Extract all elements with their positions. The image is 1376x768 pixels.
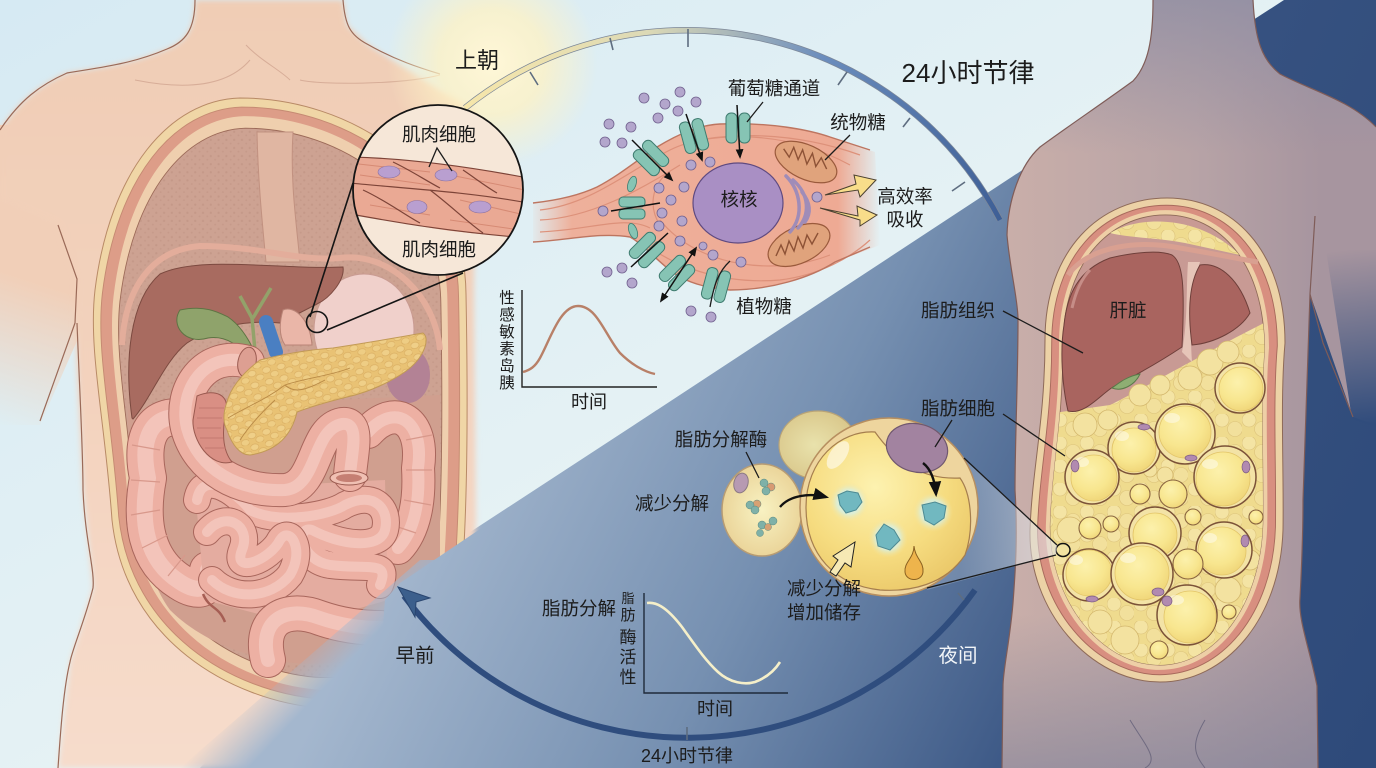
- spleen: [386, 347, 430, 403]
- label: reduced lipolysis: 减少分解: [635, 493, 709, 514]
- right body figure: [1002, 0, 1376, 768]
- lower-left fade of left body into night: [188, 410, 657, 768]
- duodenum and jejunum: [185, 345, 368, 490]
- nucleus: [693, 163, 783, 243]
- y-axis label: 素: [499, 340, 515, 358]
- label: adipocyte: 脂肪细胞: [921, 398, 995, 419]
- zoom pointer lines: [306, 183, 463, 332]
- zoom wedge from right body to fat cell: [927, 458, 1057, 590]
- abdominal fat mass: [1050, 222, 1264, 665]
- small adipocyte: [722, 464, 802, 556]
- x-axis label: 时间: [697, 699, 733, 719]
- y-axis label: 酶: [620, 628, 636, 647]
- y-axis label: 感: [499, 306, 515, 324]
- label: top sugar: 统物糖: [830, 112, 886, 133]
- y-axis label: 肪: [620, 607, 636, 624]
- large adipocyte: [746, 417, 978, 596]
- glucose channels: [619, 113, 750, 304]
- chart: lipase activity: [542, 591, 788, 719]
- label: 24h rhythm bottom: 24小时节律: [641, 746, 733, 766]
- label: increased storage: 增加储存: [787, 602, 861, 623]
- lower cavity backing: [128, 395, 440, 664]
- back adipocyte: [779, 411, 857, 479]
- liver label: 肝脏: [1109, 300, 1147, 321]
- chart side label: 脂肪分解: [542, 598, 616, 619]
- upper arc colour: [465, 30, 1000, 220]
- label: morning: 上朝: [455, 48, 499, 73]
- small intestine: [195, 480, 388, 625]
- left body figure: [0, 0, 476, 768]
- body outline strokes: [0, 0, 440, 768]
- curved black arrows: [780, 495, 826, 507]
- cell body: [533, 124, 880, 290]
- arm fade into night: [1326, 250, 1376, 427]
- label: bottom sugar: 植物糖: [736, 296, 792, 317]
- membrane edge: [533, 124, 870, 290]
- label: early: 早前: [395, 645, 435, 667]
- label: night: 夜间: [938, 645, 978, 667]
- fat cell nuclei: [1071, 424, 1250, 606]
- 24-hour clock arc: [398, 29, 1000, 740]
- label: lipase: 脂肪分解酶: [675, 429, 767, 450]
- rectum: [266, 613, 382, 660]
- lipase clusters: [746, 479, 777, 536]
- body wall opening: [93, 98, 467, 708]
- labels for adipocytes: [635, 429, 861, 623]
- label: muscle cell top: 肌肉细胞: [402, 124, 476, 145]
- label: muscle cell bottom: 肌肉细胞: [402, 239, 476, 260]
- mitochondria: [761, 133, 843, 275]
- liver and falciform ligament: [1062, 252, 1250, 412]
- left arm: [0, 125, 95, 425]
- y-axis label: [499, 289, 515, 392]
- highlight: [822, 437, 854, 473]
- pancreas: [224, 333, 426, 455]
- fibres: [540, 136, 870, 281]
- liver: [129, 264, 343, 419]
- upper arc morning to day: [465, 30, 1000, 220]
- torso vertical shading: [1002, 0, 1376, 768]
- golgi: [786, 176, 809, 232]
- gallbladder and bile duct: [177, 288, 271, 362]
- x-axis label: 时间: [571, 392, 607, 412]
- label: glucose channel: 葡萄糖通道: [728, 78, 820, 99]
- outline arrow: [830, 542, 855, 576]
- stomach: [314, 274, 414, 386]
- y-axis label: 胰: [499, 374, 515, 392]
- magnified muscle inset: [350, 105, 528, 275]
- large fat cells: [1063, 363, 1265, 659]
- label: efficient: 高效率: [877, 186, 933, 207]
- label: absorption: 吸收: [886, 209, 924, 230]
- appendix: [203, 594, 225, 622]
- y-axis label: 性: [499, 289, 515, 307]
- y-axis label: 岛: [499, 357, 515, 375]
- muscle nuclei: [378, 166, 491, 214]
- sunrise glow: [387, 0, 597, 167]
- colon right: [368, 417, 432, 548]
- right body wall opening: [1030, 198, 1285, 682]
- left torso skin: [0, 0, 476, 768]
- callout lines: [429, 148, 452, 171]
- chest creases: [135, 45, 440, 85]
- membrane over liver: [1068, 245, 1258, 275]
- lipase leader: [746, 420, 952, 478]
- zoom marker on fat: [1056, 544, 1070, 556]
- leader lines to right body: [921, 300, 1083, 588]
- label: reduced lipolysis line 1: 减少分解: [787, 578, 861, 599]
- glucose particles: [598, 87, 822, 322]
- label: 24h rhythm top: 24小时节律: [902, 58, 1034, 88]
- y-axis label: [620, 591, 636, 687]
- nucleus: [881, 417, 953, 479]
- lower arc with arrow: [404, 590, 975, 738]
- colon left: [131, 417, 209, 589]
- y-axis label: 活: [620, 648, 636, 667]
- y-axis label: 性: [620, 668, 636, 687]
- arrowhead: [398, 587, 430, 617]
- label: adipose tissue: 脂肪组织: [921, 300, 995, 321]
- right torso and arm skin: [1002, 0, 1376, 768]
- panel: adipocytes: [635, 411, 978, 623]
- esophagus band: [257, 132, 300, 262]
- groin creases: [1130, 720, 1205, 768]
- high-efficiency yellow arrows: [820, 175, 877, 226]
- cell labels: [728, 78, 933, 317]
- uptake arrows: [611, 105, 740, 307]
- lipid drop: [905, 546, 923, 580]
- diaphragm membrane: [122, 246, 440, 350]
- y-axis label: 敏: [499, 323, 515, 341]
- clock ticks: [530, 29, 965, 740]
- esophagus junction: [280, 309, 312, 345]
- leader lines: [747, 102, 850, 160]
- chart: insulin sensitivity: [499, 289, 657, 412]
- y-axis label: 脂: [621, 591, 635, 606]
- portal vein: [266, 322, 276, 352]
- panel: muscle cell: [533, 78, 933, 322]
- right body outline: [1002, 0, 1376, 768]
- fat cell highlights: [1069, 413, 1218, 605]
- arc labels: [395, 48, 1034, 766]
- enzymes: [829, 482, 953, 558]
- vesicles: [626, 175, 639, 240]
- nucleus: 核核: [720, 189, 758, 210]
